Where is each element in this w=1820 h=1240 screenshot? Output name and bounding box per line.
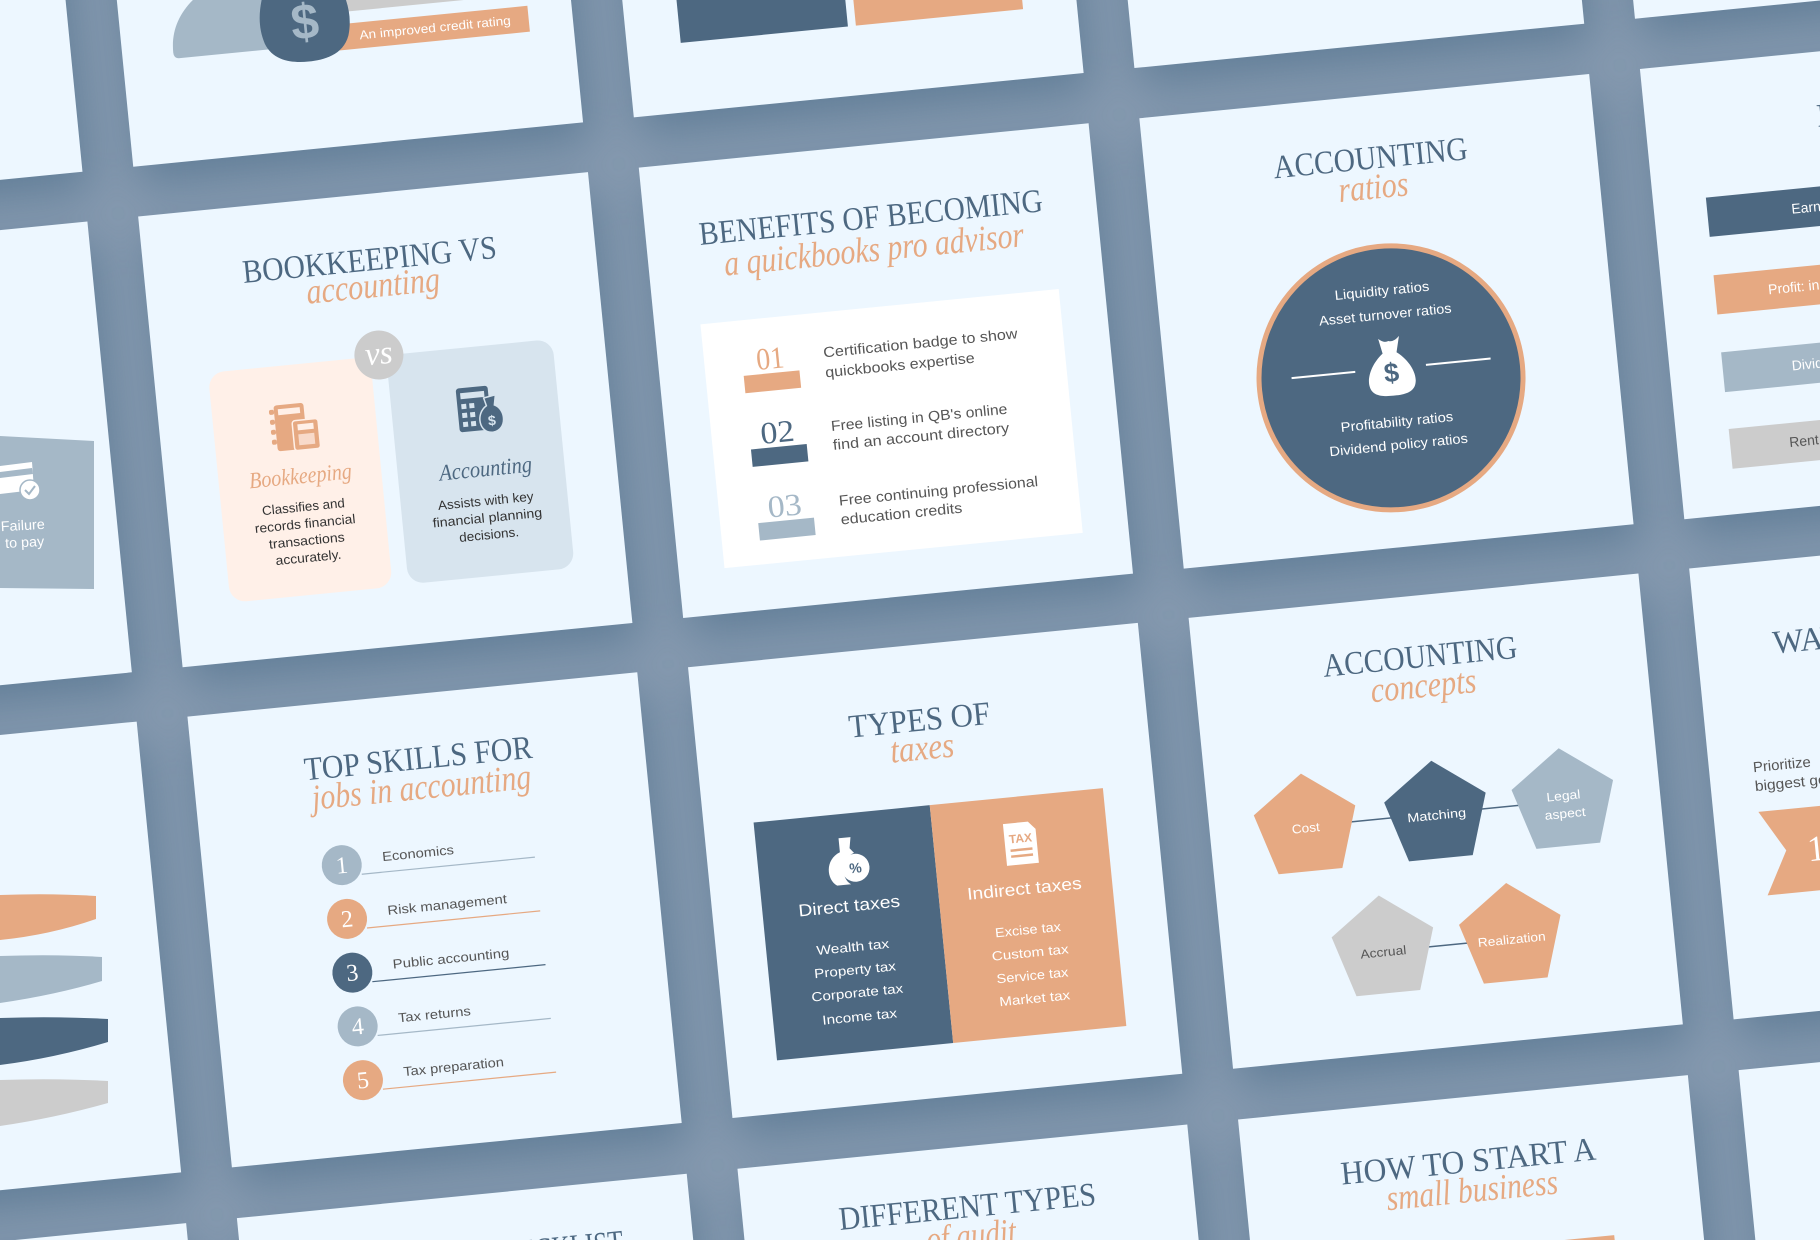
orange bar	[1714, 241, 1820, 315]
icon: money bag	[1365, 335, 1417, 398]
subheading: taxes	[888, 725, 956, 771]
skill 5: 5	[356, 1068, 370, 1095]
steel bar	[1721, 318, 1820, 392]
panel: how to start a small business	[1238, 1075, 1732, 1240]
skill 5	[341, 1041, 557, 1102]
navy bar	[1706, 163, 1820, 237]
panel: different types of audit	[737, 1124, 1232, 1240]
subheading: a quickbooks pro advisor	[722, 214, 1026, 284]
heading: TYPES OF	[847, 696, 992, 746]
panel: blank bottom right card	[1739, 1026, 1820, 1240]
indirect taxes block: Service tax	[996, 964, 1070, 986]
icon: bag with percent: %	[849, 859, 863, 876]
panel: top skills for jobs in accounting	[187, 672, 682, 1167]
label	[0, 516, 46, 551]
text block	[1752, 751, 1820, 795]
vs badge	[352, 328, 406, 382]
item 02: 02	[759, 413, 796, 451]
panel: benefits of becoming a quickbooks pro advisor	[639, 123, 1133, 618]
item 01: Certification badge to show	[823, 326, 1019, 361]
fin: orange	[0, 894, 96, 940]
skill 4: Tax returns	[397, 1003, 472, 1025]
panel: accounting concepts	[1189, 574, 1683, 1069]
pentagon: realization: Realization	[1477, 929, 1546, 950]
panel: bookkeeping vs accounting	[138, 172, 632, 667]
subheading: concepts	[1369, 660, 1478, 710]
fin: navy	[0, 1017, 108, 1065]
label: Failure	[0, 516, 45, 534]
ratio circle: Asset turnover ratios	[1318, 301, 1452, 329]
indirect taxes block: Excise tax	[994, 919, 1062, 940]
pentagon: accrual	[1328, 891, 1439, 998]
ratio circle: Profitability ratios	[1340, 409, 1454, 435]
pentagon: matching	[1381, 756, 1492, 863]
pentagon: cost	[1250, 769, 1361, 876]
description: decisions.	[458, 524, 520, 545]
panel: failure card	[0, 221, 132, 717]
bookkeeping panel	[208, 357, 393, 603]
orange ribbon	[1758, 777, 1820, 896]
panel: accounting ratios	[1139, 74, 1634, 569]
heading: BENEFITS OF BECOMING	[697, 183, 1044, 253]
panel: checklist card	[237, 1174, 731, 1240]
item 03: Free continuing professional	[838, 474, 1039, 510]
indirect taxes block: Custom tax	[991, 941, 1070, 964]
panel: credit rating card	[89, 0, 583, 167]
heading: DIFFERENT TYPES	[837, 1177, 1098, 1238]
indirect taxes block	[930, 788, 1126, 1043]
orange bar with label: An improved credit rating	[359, 14, 511, 42]
icon: bag with percent	[826, 836, 871, 886]
icon: calculator and money bag: $	[487, 412, 497, 429]
ratio circle: Dividend policy ratios	[1329, 431, 1469, 459]
skill 2: Risk management	[387, 891, 508, 918]
skill 5: Tax preparation	[403, 1054, 505, 1079]
indirect taxes block: Market tax	[999, 987, 1071, 1009]
label: Bookkeeping	[248, 458, 353, 493]
grey bar	[1729, 395, 1820, 469]
label: to pay	[5, 533, 45, 551]
description: accurately.	[275, 547, 342, 568]
item 02	[748, 392, 1011, 467]
subheading: ratios	[1336, 163, 1410, 210]
pentagon: legal aspect: aspect	[1544, 805, 1587, 823]
panel: blank card top left	[0, 0, 82, 216]
description: financial planning	[432, 505, 543, 531]
vs badge: vs	[363, 335, 394, 373]
description: Classifies and	[261, 495, 345, 518]
panel: failure to pay tile	[0, 436, 94, 589]
white list panel	[700, 289, 1083, 568]
direct taxes block: Direct taxes	[798, 892, 901, 921]
panel: income card with bars	[1640, 25, 1820, 519]
icon: credit card with check	[0, 462, 40, 500]
pentagon: cost: Cost	[1291, 820, 1321, 837]
subheading: jobs in accounting	[307, 756, 533, 818]
orange block	[845, 0, 1023, 26]
direct taxes block	[754, 805, 953, 1060]
heading: BOOKKEEPING VS	[241, 230, 498, 291]
heading: ACCOUNTING	[1321, 630, 1519, 685]
skill 1	[320, 826, 536, 887]
skill 4: 4	[351, 1014, 365, 1041]
orange bar	[1452, 1235, 1618, 1240]
pentagon: realization	[1455, 878, 1567, 986]
subheading: small business	[1385, 1161, 1560, 1218]
icon: money bag	[254, 0, 353, 66]
fin: steel	[0, 955, 102, 1003]
skill 3: Public accounting	[392, 945, 510, 972]
item 02: find an account directory	[832, 421, 1011, 454]
heading: TOP SKILLS FOR	[303, 730, 534, 788]
pentagon: accrual: Accrual	[1360, 943, 1407, 962]
pentagon: legal aspect	[1508, 743, 1619, 851]
item 03: education credits	[840, 501, 963, 528]
panel: ways to card	[1689, 524, 1820, 1019]
description: records financial	[254, 511, 356, 536]
navy block	[669, 0, 848, 43]
heading: ACCOUNTING	[1272, 131, 1469, 186]
skill 2: 2	[340, 906, 354, 933]
grey bar	[315, 0, 526, 14]
ratio circle: Liquidity ratios	[1334, 279, 1430, 303]
accounting panel	[386, 339, 575, 584]
panel: blank bottom left card	[0, 1223, 230, 1240]
steel dome shape	[166, 0, 322, 59]
description: Assists with key	[437, 489, 535, 513]
description	[252, 494, 360, 570]
item 01	[741, 316, 1021, 393]
item 02: Free listing in QB's online	[830, 402, 1008, 435]
panel: top middle card with colour blocks	[589, 0, 1084, 117]
icon: notebook and calculator	[268, 401, 321, 453]
icon: money bag: $	[1383, 357, 1400, 388]
indirect taxes block: Indirect taxes	[966, 874, 1083, 904]
label: Accounting	[436, 452, 533, 486]
skill 3	[330, 934, 546, 994]
direct taxes block: Property tax	[813, 958, 897, 981]
skill 1: Economics	[381, 842, 455, 864]
direct taxes block: Income tax	[822, 1005, 898, 1028]
direct taxes block: Wealth tax	[816, 936, 890, 958]
direct taxes block: Corporate tax	[811, 981, 904, 1005]
fin: grey	[0, 1079, 108, 1126]
orange bar with label	[320, 6, 530, 52]
skill 3: 3	[345, 960, 360, 987]
item 01: quickbooks expertise	[825, 351, 975, 381]
pentagon: matching: Matching	[1407, 806, 1467, 825]
ratio circle	[1247, 234, 1535, 522]
item 03: 03	[766, 486, 803, 525]
pentagon: legal aspect: Legal	[1546, 787, 1581, 805]
description	[430, 488, 545, 547]
description: transactions	[268, 529, 346, 552]
item 01: 01	[754, 339, 786, 377]
heading: HOW TO START A	[1339, 1132, 1598, 1193]
skill 2	[325, 880, 541, 941]
text block: Prioritize	[1752, 755, 1812, 776]
panel: types of taxes	[688, 623, 1182, 1118]
icon: calculator and money bag	[456, 384, 505, 435]
subheading: accounting	[304, 259, 442, 312]
skill 4	[336, 988, 552, 1048]
icon: tax document	[1003, 821, 1039, 866]
panel: blank card top right	[1590, 0, 1820, 19]
icon: tax document: TAX	[1008, 830, 1033, 847]
skill 1: 1	[335, 853, 349, 880]
panel: fins card	[0, 722, 181, 1217]
panel: blank card top	[1090, 0, 1584, 68]
item 03	[755, 463, 1041, 541]
